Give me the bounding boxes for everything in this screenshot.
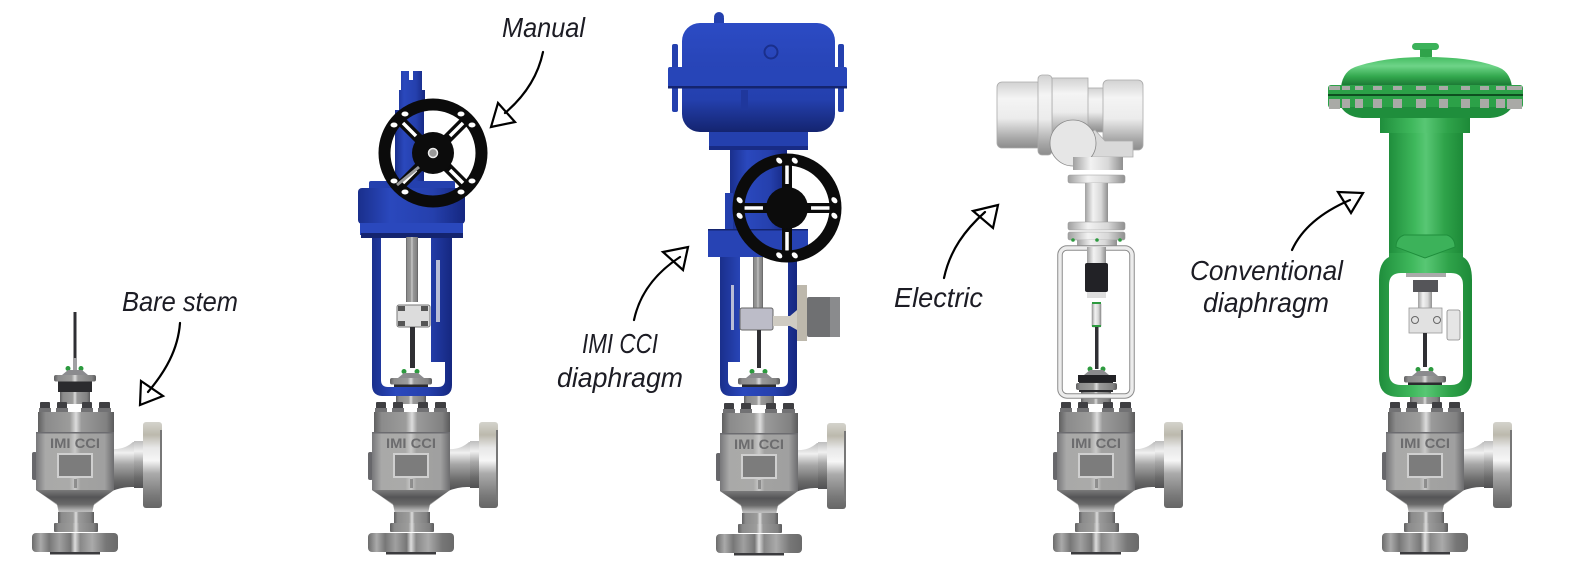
valve: bare stem: IMI CCI <box>50 435 100 451</box>
bellows and stem <box>1085 247 1108 369</box>
lantern shaft and flanges <box>1068 157 1125 247</box>
label: Conventional diaphragm: Conventional <box>1190 255 1344 286</box>
label: IMI CCI diaphragm: IMI CCI <box>582 328 658 359</box>
prongs and column <box>395 71 425 185</box>
label: IMI CCI diaphragm <box>557 328 683 393</box>
column <box>1389 133 1463 253</box>
label: Conventional diaphragm: diaphragm <box>1203 287 1329 318</box>
column and mid plate <box>708 150 808 257</box>
valve: manual actuator: IMI CCI <box>386 435 436 451</box>
handwheel <box>384 104 482 202</box>
positioner <box>773 285 840 341</box>
arrow: IMI CCI diaphragm <box>634 247 688 320</box>
label: Conventional diaphragm <box>1190 255 1344 318</box>
handwheel <box>718 139 856 277</box>
valve: IMI CCI diaphragm actuator: IMI CCI <box>734 436 784 452</box>
yoke frame <box>1060 248 1132 396</box>
valve: conventional diaphragm actuator <box>1328 43 1523 554</box>
diaphragm casing <box>1328 43 1523 133</box>
label: Electric: Electric <box>894 282 983 313</box>
valve: electric actuator: IMI CCI <box>1071 435 1121 451</box>
diaphragm housing <box>668 12 847 150</box>
valve: conventional diaphragm actuator: IMI CCI <box>1400 435 1450 451</box>
valve: IMI CCI diaphragm actuator <box>668 12 856 556</box>
yoke <box>372 238 452 396</box>
arrow: conventional diaphragm <box>1292 192 1363 250</box>
valve top plate <box>1076 366 1117 390</box>
shield <box>1396 235 1455 258</box>
arrow: bare stem <box>140 323 180 405</box>
label: Manual: Manual <box>502 12 586 43</box>
label: Bare stem: Bare stem <box>122 286 238 317</box>
motor housing <box>997 75 1143 166</box>
stem and clamp <box>740 257 773 368</box>
label: IMI CCI diaphragm: diaphragm <box>557 362 683 393</box>
valve: bare stem <box>32 312 162 554</box>
gearbox <box>358 181 465 238</box>
valve: electric actuator <box>997 75 1183 554</box>
stem and clamp <box>397 237 430 368</box>
yoke <box>1379 250 1472 397</box>
yoke <box>720 257 797 396</box>
stem assembly <box>1406 273 1460 367</box>
arrow: manual <box>491 52 543 127</box>
valve: manual actuator <box>358 71 498 554</box>
arrow: electric <box>944 205 998 278</box>
